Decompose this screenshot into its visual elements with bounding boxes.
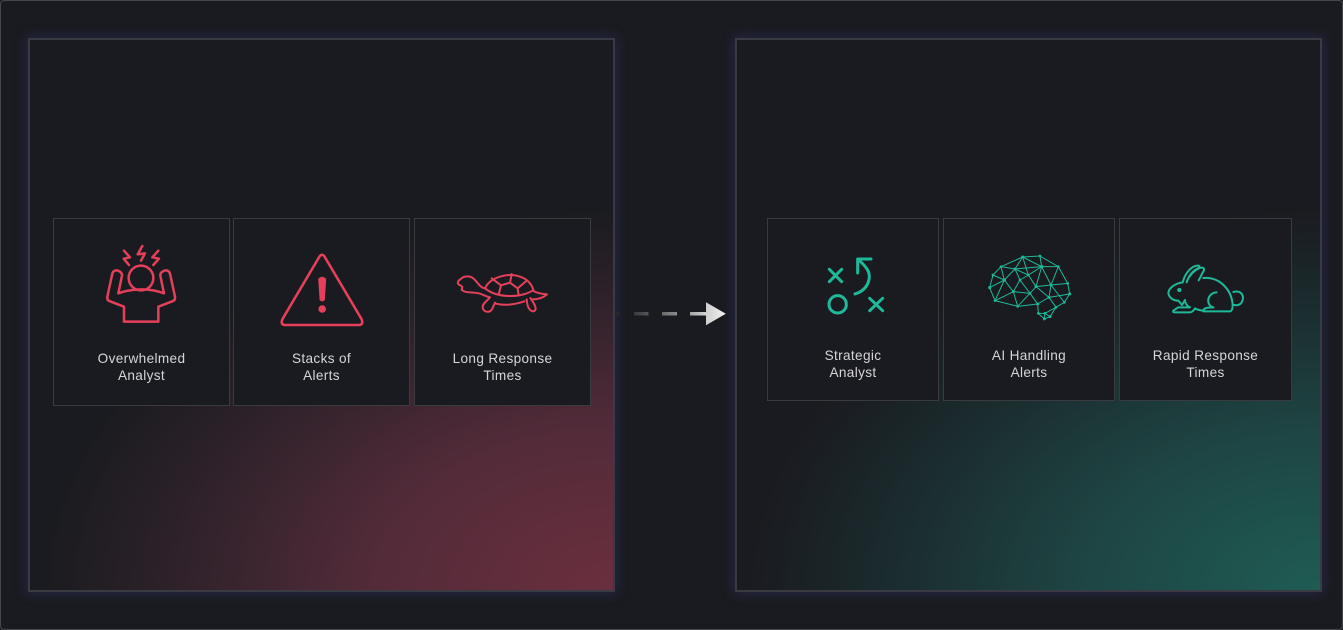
card: strategic analyst: Strategic bbox=[825, 348, 881, 363]
card: overwhelmed analyst: Overwhelmed bbox=[98, 351, 185, 366]
card: AI handling alerts: Alerts bbox=[1011, 365, 1047, 380]
card: rapid response times bbox=[1119, 218, 1292, 401]
arrow: dashed transition bbox=[616, 302, 726, 325]
card: overwhelmed analyst bbox=[53, 218, 230, 406]
card: overwhelmed analyst: Analyst bbox=[118, 368, 165, 383]
icon: AI brain bbox=[988, 255, 1071, 320]
card: strategic analyst: Analyst bbox=[829, 365, 877, 380]
card: long response times bbox=[414, 218, 591, 406]
card: AI handling alerts: AI Handling bbox=[992, 348, 1066, 363]
card: strategic analyst bbox=[767, 218, 939, 401]
card: rapid response times: Times bbox=[1186, 365, 1225, 380]
icon: turtle bbox=[458, 274, 547, 312]
panel: after bbox=[735, 38, 1322, 592]
card: stacks of alerts: Stacks of bbox=[292, 351, 351, 366]
card: long response times: Long Response bbox=[453, 351, 552, 366]
card: stacks of alerts: Alerts bbox=[303, 368, 340, 383]
card: rapid response times: Rapid Response bbox=[1153, 348, 1258, 363]
panel: before bbox=[28, 38, 615, 592]
icon: overwhelmed analyst bbox=[107, 246, 175, 322]
icon: warning triangle bbox=[282, 255, 362, 325]
card: AI handling alerts bbox=[943, 218, 1115, 401]
card: long response times: Times bbox=[483, 368, 522, 383]
icon: strategy play bbox=[829, 259, 883, 313]
icon: rabbit bbox=[1168, 266, 1243, 312]
card: stacks of alerts bbox=[233, 218, 410, 406]
